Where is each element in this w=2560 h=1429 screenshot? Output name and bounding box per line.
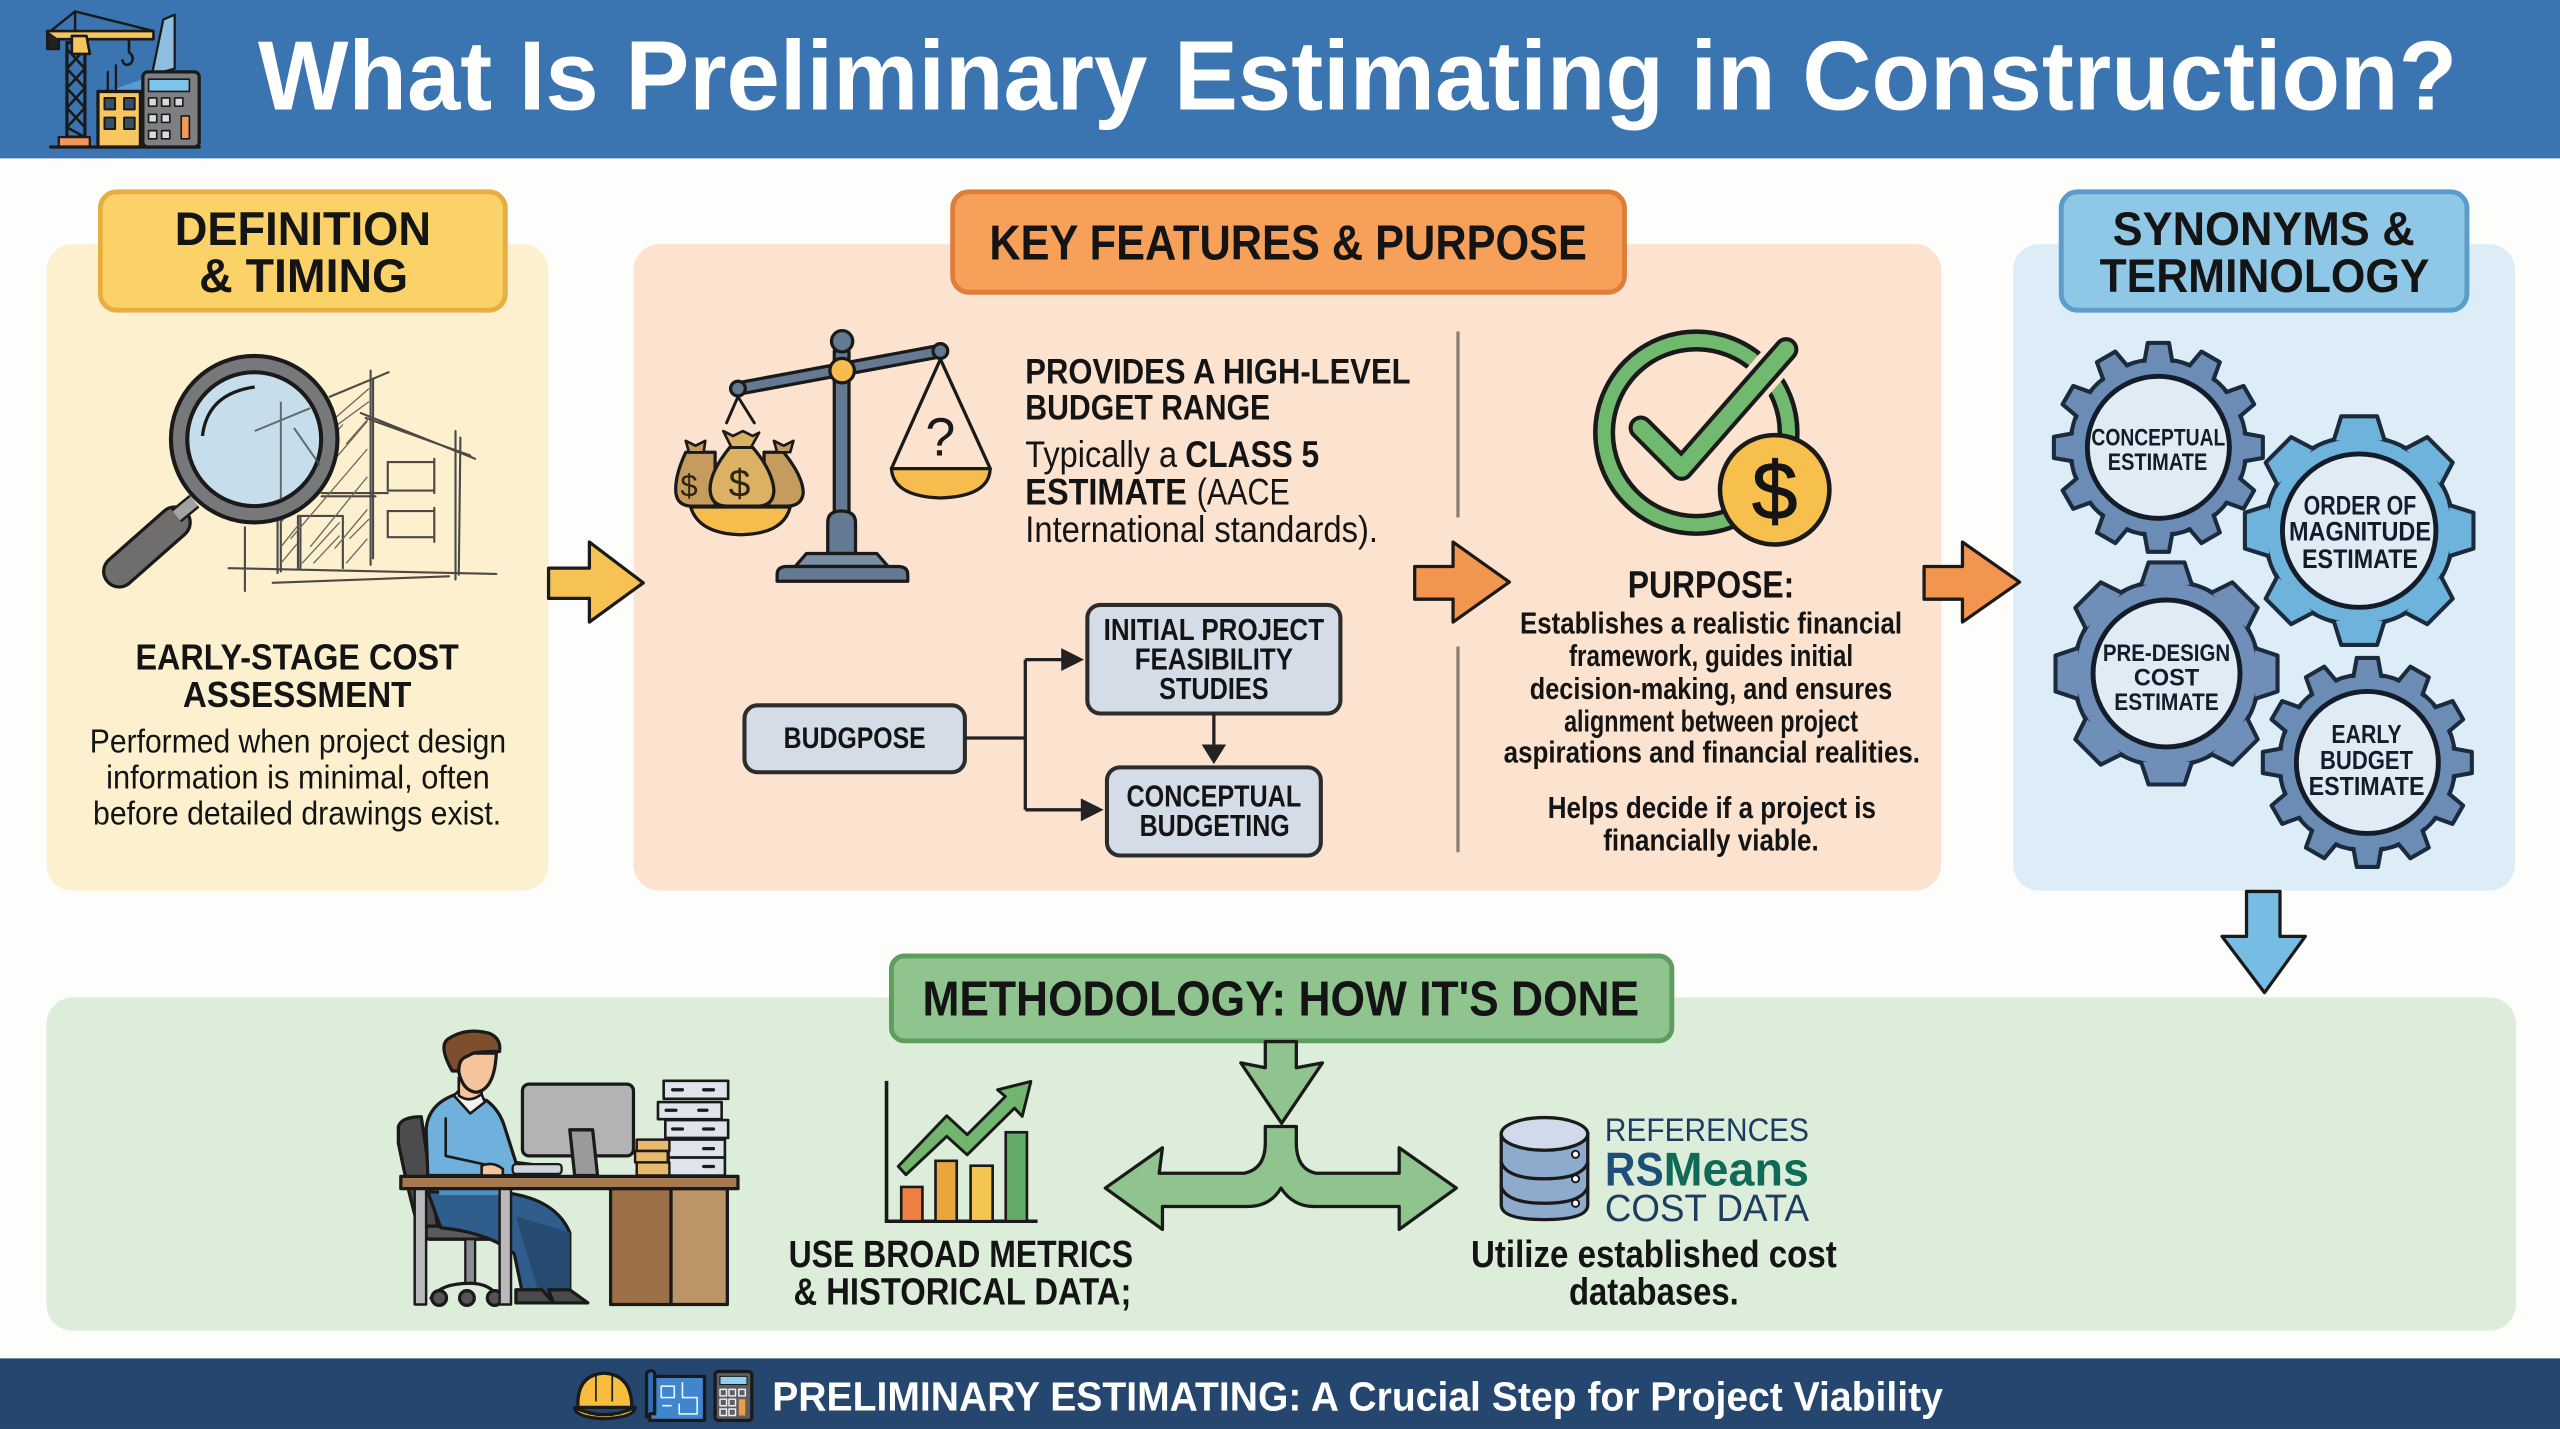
subheading: early-stage cost assessment: EARLY-STAGE COST bbox=[136, 636, 459, 677]
gear: order of magnitude estimate: MAGNITUDE bbox=[2289, 516, 2431, 546]
logo text: references RSMeans cost data: REFERENCES bbox=[1605, 1111, 1809, 1148]
icon: database cylinder bbox=[1501, 1118, 1588, 1220]
text: high-level budget range: Typically a bbox=[1025, 434, 1178, 475]
heading: key features & purpose bbox=[953, 192, 1624, 292]
heading: methodology bbox=[891, 956, 1672, 1041]
logo text: references RSMeans cost data: Means bbox=[1664, 1143, 1809, 1196]
text: high-level budget range: (AACE bbox=[1197, 471, 1290, 512]
divider bbox=[1457, 331, 1459, 852]
header band bbox=[0, 0, 2560, 158]
box: initial project feasibility studies: INITIAL PROJECT bbox=[1104, 614, 1325, 647]
gear: conceptual estimate: ESTIMATE bbox=[2108, 450, 2207, 476]
icon: magnifying glass over sketched building bbox=[119, 356, 496, 591]
heading: definition & timing: DEFINITION bbox=[175, 203, 431, 256]
arrow: two-way branch bbox=[1105, 1127, 1456, 1229]
gear: early budget estimate bbox=[2263, 658, 2472, 867]
subheading: early-stage cost assessment bbox=[136, 636, 459, 715]
text: high-level budget range: International standards). bbox=[1025, 509, 1378, 550]
logo text: references RSMeans cost data bbox=[1605, 1111, 1809, 1229]
title: What Is Preliminary Estimating in Construction? bbox=[258, 20, 2457, 130]
gear: pre-design cost estimate: ESTIMATE bbox=[2114, 690, 2219, 716]
text: high-level budget range bbox=[1025, 353, 1411, 550]
icon: balance scale with money bags: $ bbox=[729, 462, 751, 505]
illustration: estimator at desk bbox=[398, 1031, 738, 1305]
arrow: definition to features bbox=[549, 542, 643, 622]
text: high-level budget range: CLASS 5 bbox=[1185, 434, 1319, 475]
text: high-level budget range: PROVIDES A HIGH-LEVEL bbox=[1025, 353, 1411, 392]
gear: pre-design cost estimate: COST bbox=[2134, 666, 2200, 692]
arrow: synonyms to methodology bbox=[2222, 891, 2305, 993]
box: conceptual budgeting: CONCEPTUAL bbox=[1127, 781, 1301, 814]
box: initial project feasibility studies: FEASIBILITY bbox=[1135, 643, 1293, 676]
logo text: references RSMeans cost data: COST DATA bbox=[1605, 1187, 1809, 1229]
text: definition body bbox=[90, 724, 506, 832]
icon: blueprint bbox=[647, 1371, 704, 1420]
gear: pre-design cost estimate bbox=[2056, 562, 2278, 784]
arrows: flow connectors bbox=[965, 648, 1226, 821]
text: definition body: Performed when project design bbox=[90, 724, 506, 761]
text: purpose bbox=[1504, 564, 1920, 858]
box: budgpose: BUDGPOSE bbox=[784, 722, 926, 755]
arrow: heading down to branch bbox=[1241, 1042, 1322, 1123]
icon: calculator bbox=[715, 1371, 752, 1420]
text: purpose: Establishes a realistic financial bbox=[1520, 607, 1902, 640]
icon: balance scale with money bags: ? bbox=[925, 408, 955, 468]
heading: definition & timing bbox=[100, 192, 505, 310]
icon: green check with dollar coin: $ bbox=[1752, 446, 1797, 537]
text: definition body: information is minimal, often bbox=[106, 760, 490, 797]
text: definition body: before detailed drawings exist. bbox=[93, 795, 501, 832]
text: high-level budget range: BUDGET RANGE bbox=[1025, 389, 1270, 428]
text: established cost databases bbox=[1471, 1233, 1837, 1312]
gear: conceptual estimate: CONCEPTUAL bbox=[2091, 426, 2225, 452]
gear: conceptual estimate bbox=[2054, 343, 2263, 552]
gear: early budget estimate: BUDGET bbox=[2320, 745, 2413, 775]
heading: methodology: METHODOLOGY: HOW IT'S DONE bbox=[922, 973, 1639, 1027]
text: purpose: financially viable. bbox=[1603, 825, 1819, 858]
gear: pre-design cost estimate: PRE-DESIGN bbox=[2103, 641, 2230, 667]
box: conceptual budgeting bbox=[1107, 767, 1321, 856]
text: purpose: alignment between project bbox=[1564, 705, 1858, 738]
box: budgpose bbox=[744, 705, 965, 772]
gear: order of magnitude estimate: ESTIMATE bbox=[2302, 544, 2418, 574]
footer band bbox=[0, 1358, 2560, 1429]
text: established cost databases: Utilize established cost bbox=[1471, 1233, 1837, 1275]
icon: crane, building and calculator bbox=[47, 11, 199, 147]
heading: synonyms & terminology: SYNONYMS & bbox=[2113, 203, 2415, 256]
box: initial project feasibility studies bbox=[1087, 605, 1340, 713]
icon: balance scale with money bags: $ bbox=[680, 468, 698, 503]
footer text: PRELIMINARY ESTIMATING: A Crucial Step for Project Viability bbox=[772, 1374, 1943, 1420]
text: high-level budget range: ESTIMATE bbox=[1025, 471, 1187, 512]
text: purpose: PURPOSE: bbox=[1628, 564, 1794, 606]
heading: key features & purpose: KEY FEATURES & PURPOSE bbox=[989, 217, 1587, 271]
text: broad metrics and historical data: USE BROAD METRICS bbox=[789, 1233, 1133, 1275]
icon: green check with dollar coin bbox=[1604, 340, 1829, 544]
panel: synonyms & terminology bbox=[2013, 192, 2515, 891]
flow diagram: budget uses bbox=[744, 605, 1340, 856]
panel: key features & purpose bbox=[633, 192, 1941, 891]
icon: hard hat bbox=[575, 1373, 635, 1419]
heading: definition & timing: & TIMING bbox=[199, 250, 408, 303]
text: broad metrics and historical data bbox=[789, 1233, 1133, 1312]
gear: early budget estimate: EARLY bbox=[2331, 719, 2402, 749]
text: purpose: decision-making, and ensures bbox=[1530, 673, 1892, 706]
heading: synonyms & terminology bbox=[2061, 192, 2467, 310]
arrow: inside features panel bbox=[1415, 542, 1509, 622]
text: purpose: Helps decide if a project is bbox=[1548, 792, 1876, 825]
gear: order of magnitude estimate: ORDER OF bbox=[2304, 490, 2416, 520]
subheading: early-stage cost assessment: ASSESSMENT bbox=[183, 674, 411, 715]
text: purpose: framework, guides initial bbox=[1569, 640, 1853, 673]
logo text: references RSMeans cost data: RS bbox=[1605, 1143, 1664, 1196]
panel: methodology bbox=[47, 956, 2516, 1331]
icon: balance scale with money bags bbox=[676, 331, 990, 581]
box: conceptual budgeting: BUDGETING bbox=[1140, 810, 1290, 843]
text: purpose: aspirations and financial realities. bbox=[1504, 736, 1920, 769]
gear: early budget estimate: ESTIMATE bbox=[2309, 771, 2424, 801]
heading: synonyms & terminology: TERMINOLOGY bbox=[2100, 250, 2429, 303]
box: initial project feasibility studies: STUDIES bbox=[1159, 673, 1269, 706]
panel: definition & timing bbox=[47, 192, 549, 891]
text: established cost databases: databases. bbox=[1569, 1270, 1739, 1312]
chart: rising bars with green arrow bbox=[887, 1081, 1038, 1221]
text: broad metrics and historical data: & HISTORICAL DATA; bbox=[793, 1270, 1131, 1312]
gear: order of magnitude estimate bbox=[2245, 416, 2473, 645]
arrow: features to synonyms bbox=[1924, 542, 2020, 622]
